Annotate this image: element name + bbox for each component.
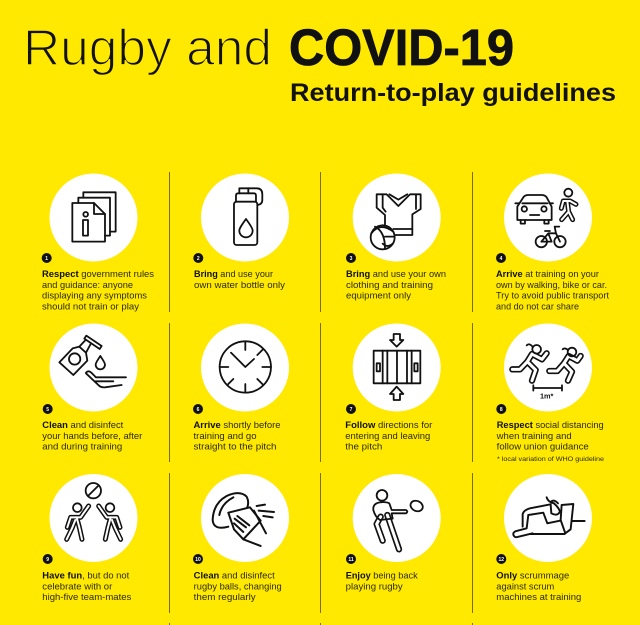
text: step 8: when training and bbox=[496, 431, 572, 441]
text: step 4: Try to avoid public transport bbox=[496, 291, 609, 301]
panel: 2 water bottle bbox=[193, 174, 289, 290]
title: Rugby and bbox=[23, 19, 272, 76]
icon: shirt and headgear bbox=[371, 194, 421, 249]
panel: 5 clean hands bbox=[42, 324, 142, 452]
panel: 2 water bottle: 2 bbox=[197, 256, 200, 262]
text: step 4: and do not car share bbox=[496, 302, 579, 312]
text: step 5: and during training bbox=[42, 442, 122, 452]
text: step 7: the pitch bbox=[345, 442, 382, 452]
text: step 12: machines at training bbox=[496, 592, 581, 602]
icon: player at scrum machine bbox=[513, 497, 585, 537]
title: COVID-19 bbox=[289, 19, 514, 76]
text: step 8 bbox=[496, 420, 605, 463]
text: step 1: and guidance: anyone bbox=[42, 280, 133, 290]
text: step 2 bbox=[194, 269, 285, 290]
icon: no high-five bbox=[67, 483, 121, 539]
text: step 10: them regularly bbox=[194, 592, 256, 602]
text: step 1: displaying any symptoms bbox=[42, 291, 147, 301]
text: step 3: clothing and training bbox=[346, 280, 433, 290]
text: step 10 bbox=[194, 570, 282, 602]
panel: 4 arrive: 4 bbox=[500, 256, 503, 262]
text: step 6: training and go bbox=[194, 431, 256, 441]
text: step 9: high-five team-mates bbox=[42, 592, 132, 602]
panel: 3 clothing: 3 bbox=[350, 256, 353, 262]
text: step 4: Arrive at training on your bbox=[496, 269, 599, 279]
text: step 10: rugby balls, changing bbox=[194, 581, 282, 591]
text: step 3: equipment only bbox=[346, 291, 411, 301]
text: step 5: Clean and disinfect bbox=[42, 420, 124, 430]
icon: rugby player and ball bbox=[373, 490, 425, 549]
panel: 8 social distancing bbox=[496, 324, 605, 463]
text: step 1: should not train or play bbox=[42, 302, 139, 312]
icon: ball and cloth bbox=[213, 493, 274, 546]
text: step 6: Arrive shortly before bbox=[194, 420, 280, 430]
panel: 7 follow directions: 7 bbox=[350, 407, 353, 413]
text: step 10: Clean and disinfect bbox=[194, 570, 275, 580]
text: step 3 bbox=[346, 269, 446, 301]
panel: 12 scrum machines bbox=[496, 474, 592, 602]
text: step 7: entering and leaving bbox=[345, 431, 430, 441]
icon: clock bbox=[220, 341, 271, 393]
panel: 10 clean balls bbox=[193, 474, 289, 602]
text: step 8: Respect social distancing bbox=[497, 420, 604, 430]
title bbox=[23, 19, 514, 76]
text: step 1 bbox=[42, 269, 154, 312]
panel: 12 scrum machines: 12 bbox=[499, 557, 504, 563]
panel: 6 arrive shortly: 6 bbox=[197, 407, 200, 413]
text: step 5: your hands before, after bbox=[42, 431, 142, 441]
text: step 6 bbox=[194, 420, 280, 452]
panel: 1 respect rules: 1 bbox=[45, 256, 48, 262]
subtitle: Return-to-play guidelines bbox=[290, 79, 616, 107]
text: step 9 bbox=[42, 570, 132, 602]
icon: documents bbox=[72, 192, 116, 242]
panel: 8 social distancing: 8 bbox=[500, 407, 503, 413]
panel: 11 enjoy: 11 bbox=[348, 557, 354, 563]
text: step 11: Enjoy being back bbox=[346, 570, 418, 580]
text: step 4: own by walking, bike or car. bbox=[496, 280, 607, 290]
text: step 12 bbox=[496, 570, 581, 602]
text: step 8: * local variation of WHO guideline bbox=[497, 456, 605, 463]
text: step 4 bbox=[496, 269, 609, 312]
text: step 7 bbox=[345, 420, 432, 452]
text: step 5 bbox=[42, 420, 142, 452]
panel: 4 arrive bbox=[496, 174, 609, 312]
icon: two runners, 1m apart: 1m* bbox=[540, 392, 554, 401]
panel: 3 clothing bbox=[346, 174, 446, 301]
icon: pitch with arrows bbox=[374, 334, 420, 400]
text: step 6: straight to the pitch bbox=[194, 442, 276, 452]
icon: sanitiser and hand bbox=[59, 336, 126, 387]
panel: 11 enjoy bbox=[346, 474, 441, 591]
panel: 1 respect rules bbox=[42, 174, 154, 312]
icon: water bottle bbox=[234, 188, 262, 245]
text: step 12: against scrum bbox=[496, 581, 555, 591]
text: step 2: Bring and use your bbox=[194, 269, 273, 279]
text: step 11 bbox=[346, 570, 418, 591]
text: step 9: Have fun, but do not bbox=[42, 570, 130, 580]
text: step 1: Respect government rules bbox=[42, 269, 154, 279]
panel: 6 arrive shortly bbox=[193, 324, 289, 452]
text: step 7: Follow directions for bbox=[345, 420, 432, 430]
panel: 5 clean hands: 5 bbox=[46, 407, 49, 413]
text: step 12: Only scrummage bbox=[496, 570, 569, 580]
text: step 3: Bring and use your own bbox=[346, 269, 446, 279]
panel: 10 clean balls: 10 bbox=[195, 557, 201, 563]
text: step 2: own water bottle only bbox=[194, 280, 285, 290]
text: step 9: celebrate with or bbox=[42, 581, 112, 591]
text: step 11: playing rugby bbox=[346, 581, 403, 591]
text: step 8: follow union guidance bbox=[497, 442, 589, 452]
icon: car, walker and bicycle bbox=[515, 189, 576, 247]
panel: 7 follow directions bbox=[345, 324, 441, 452]
panel: 9 have fun: 9 bbox=[46, 557, 49, 563]
panel: 9 have fun bbox=[42, 474, 137, 602]
